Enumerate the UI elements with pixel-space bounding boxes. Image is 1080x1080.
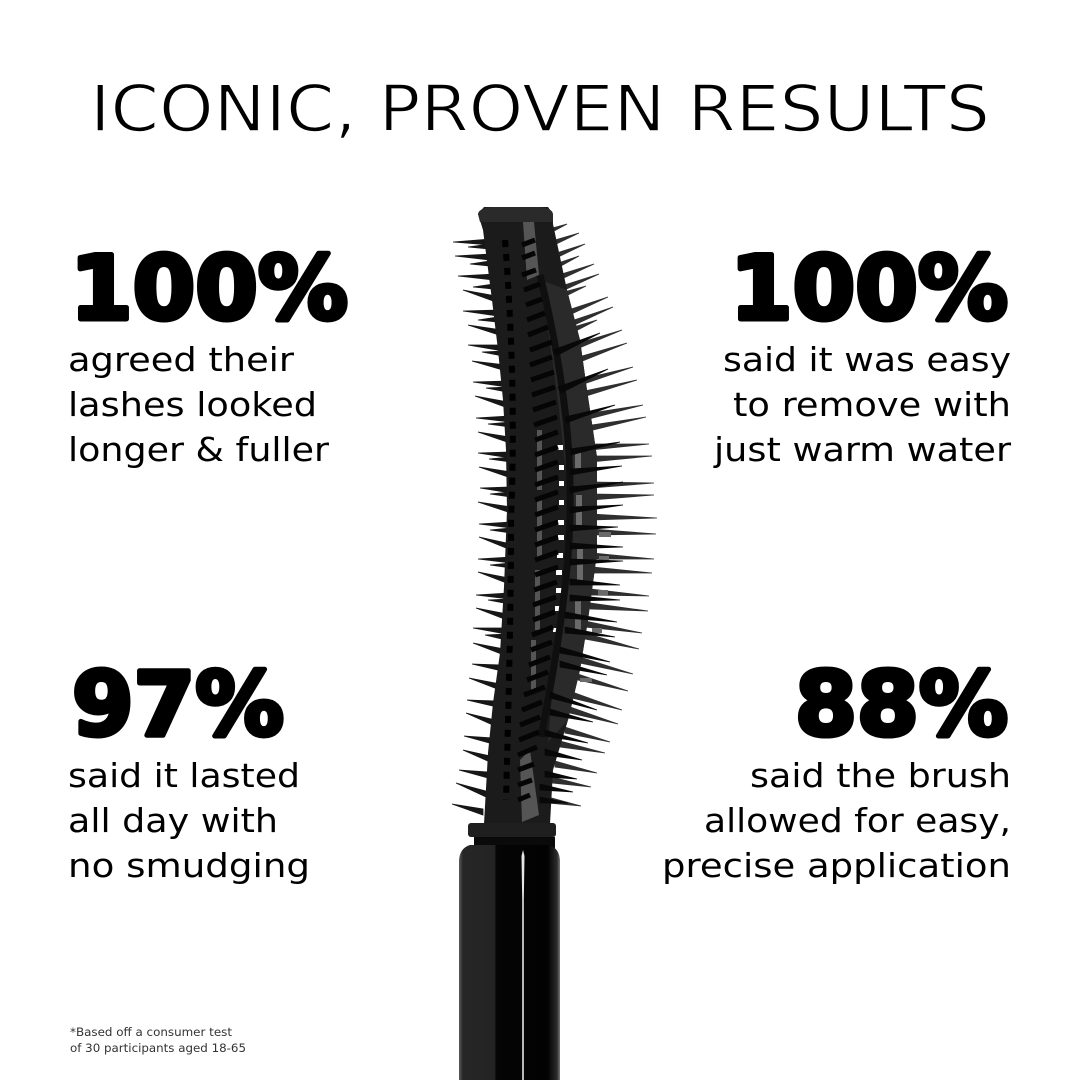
text: lasted all day: said it lasted bbox=[68, 756, 300, 795]
gray patches behind the spine bbox=[575, 450, 611, 682]
white gaps in the bristle rows bbox=[553, 445, 564, 632]
text: precise application: precise application bbox=[662, 846, 1011, 885]
mascara wand bbox=[452, 207, 657, 1080]
back bristles, right side bbox=[545, 224, 657, 806]
front bristles, right side bbox=[540, 333, 623, 803]
brush core bbox=[478, 207, 597, 824]
holes column on the core bbox=[505, 240, 513, 800]
number: 100%: 100% bbox=[730, 237, 1008, 340]
text: precise application: allowed for easy, bbox=[704, 801, 1011, 840]
left bristles bbox=[452, 239, 511, 815]
number: 100%: 100% bbox=[70, 237, 348, 340]
short front bristles on the core bbox=[518, 240, 558, 800]
handle highlight bbox=[522, 850, 524, 1080]
text: longer and fuller lashes: lashes looked bbox=[68, 385, 317, 424]
title: ICONIC, PROVEN RESULTS bbox=[90, 73, 990, 147]
stat: 88% precise application bbox=[662, 653, 1011, 885]
collar bbox=[468, 823, 556, 837]
number: 88%: 88% bbox=[795, 653, 1008, 756]
text: precise application: said the brush bbox=[750, 756, 1011, 795]
text: lasted all day: all day with bbox=[68, 801, 278, 840]
number: 97%: 97% bbox=[72, 653, 284, 756]
text: easy to remove bbox=[713, 340, 1011, 469]
neck bbox=[474, 837, 555, 848]
handle ferrule bbox=[459, 845, 560, 1080]
highlights on the core bbox=[520, 222, 542, 822]
text: lasted all day: no smudging bbox=[68, 846, 310, 885]
stat: 100% easy to remove bbox=[713, 237, 1011, 469]
spine of the brush bbox=[540, 275, 570, 737]
core lighter back section bbox=[541, 280, 597, 742]
text: easy to remove: to remove with bbox=[733, 385, 1011, 424]
text: easy to remove: just warm water bbox=[713, 430, 1011, 469]
text: longer and fuller lashes bbox=[68, 340, 329, 469]
brush tip cap bbox=[478, 207, 553, 222]
text: lasted all day bbox=[68, 756, 310, 885]
text: longer and fuller lashes: longer & fuller bbox=[68, 430, 329, 469]
stat: 100% longer and fuller bbox=[68, 237, 348, 469]
text: precise application bbox=[662, 756, 1011, 885]
footnote: of 30 participants aged 18-65 bbox=[70, 1041, 246, 1055]
footnote: *Based off a consumer test bbox=[70, 1025, 233, 1039]
stat: 97% lasted all day bbox=[68, 653, 310, 885]
text: longer and fuller lashes: agreed their bbox=[68, 340, 294, 379]
text: easy to remove: said it was easy bbox=[723, 340, 1011, 379]
footnote bbox=[70, 1025, 246, 1055]
